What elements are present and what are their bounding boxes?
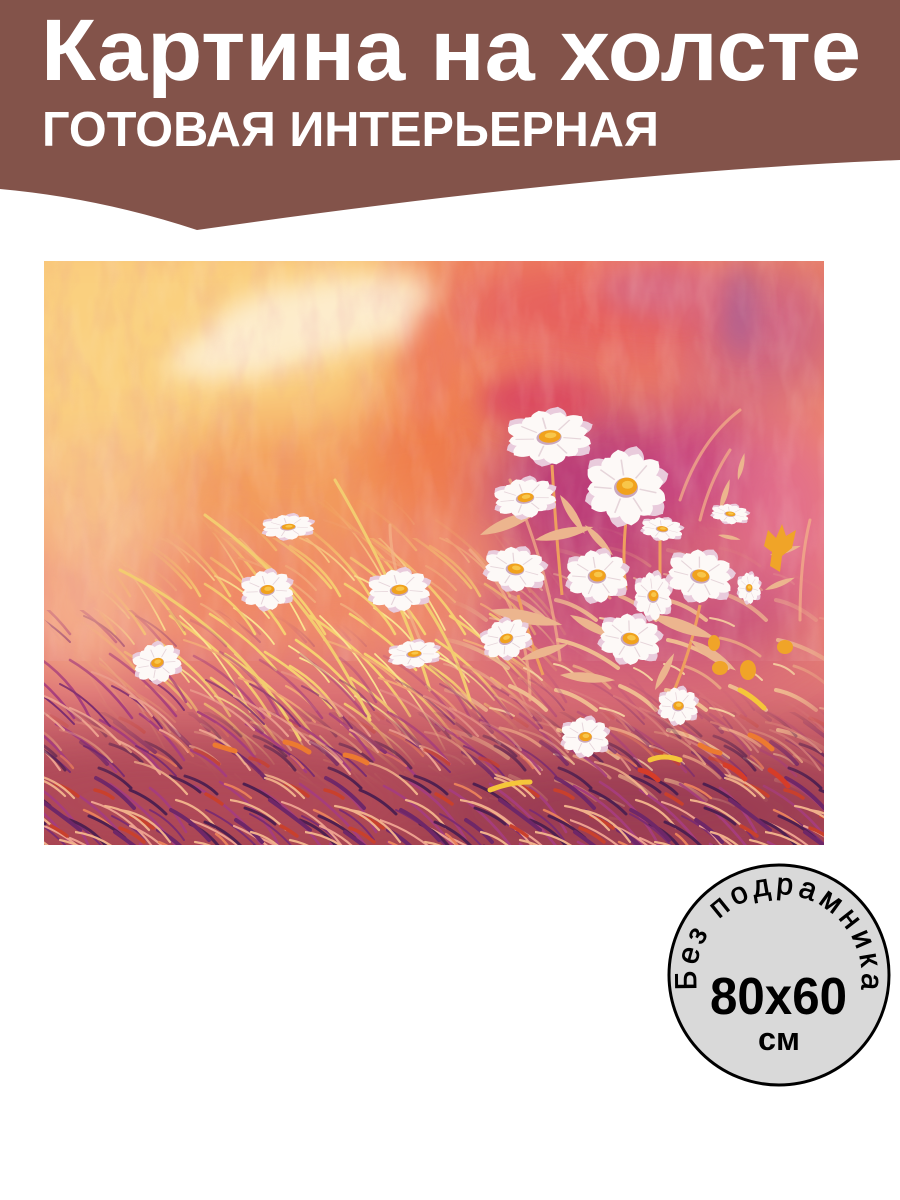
sky and haze colour fields	[44, 261, 824, 844]
orange and yellow dabs	[215, 690, 788, 790]
size badge	[668, 864, 890, 1086]
header banner	[0, 0, 900, 230]
subtitle: ГОТОВАЯ ИНТЕРЬЕРНАЯ	[42, 103, 659, 157]
size value: 80x60	[710, 968, 847, 1026]
tan leaves layer	[440, 520, 824, 820]
stems and tan leaves of the right bunch	[478, 453, 802, 700]
curved label: Без подрамника	[674, 878, 878, 990]
long grass blades	[120, 410, 810, 740]
yellow grass	[99, 514, 574, 775]
daisy flowers	[125, 402, 763, 759]
painting: daisies in a meadow	[44, 261, 824, 845]
unit: см	[758, 1021, 800, 1057]
title: Картина на холсте	[41, 2, 861, 99]
orange flower and buds at right	[708, 524, 796, 680]
dark foreground grass layer	[44, 709, 824, 845]
brush texture	[44, 261, 824, 661]
purple grass layer	[44, 610, 824, 845]
